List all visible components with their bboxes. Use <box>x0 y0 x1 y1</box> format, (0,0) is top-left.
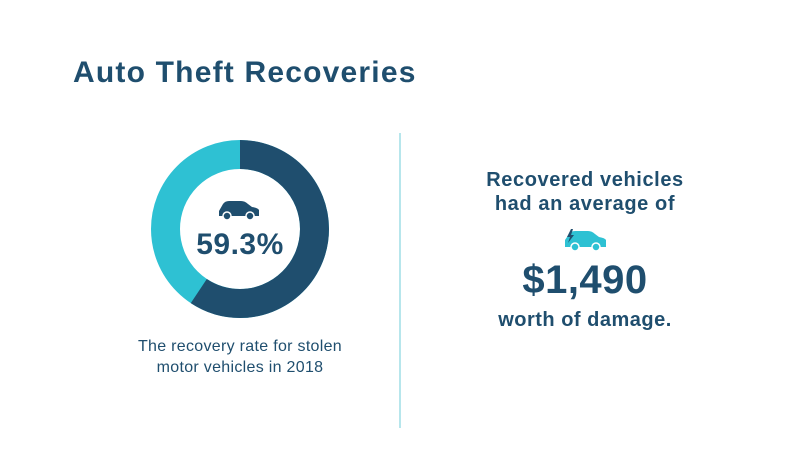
damage text: had an average of <box>495 193 675 215</box>
donut caption: The recovery rate for stolen <box>138 338 342 355</box>
icon: car <box>219 201 259 220</box>
damage text: Recovered vehicles <box>486 169 684 191</box>
donut caption <box>138 338 342 376</box>
donut caption: motor vehicles in 2018 <box>157 359 323 376</box>
damage text <box>486 169 684 215</box>
divider <box>399 133 401 428</box>
donut value: 59.3% <box>196 228 284 261</box>
damage value: $1,490 <box>522 258 648 302</box>
title: Auto Theft Recoveries <box>73 56 417 89</box>
icon: electric car <box>565 229 606 251</box>
damage caption: worth of damage. <box>498 309 672 331</box>
